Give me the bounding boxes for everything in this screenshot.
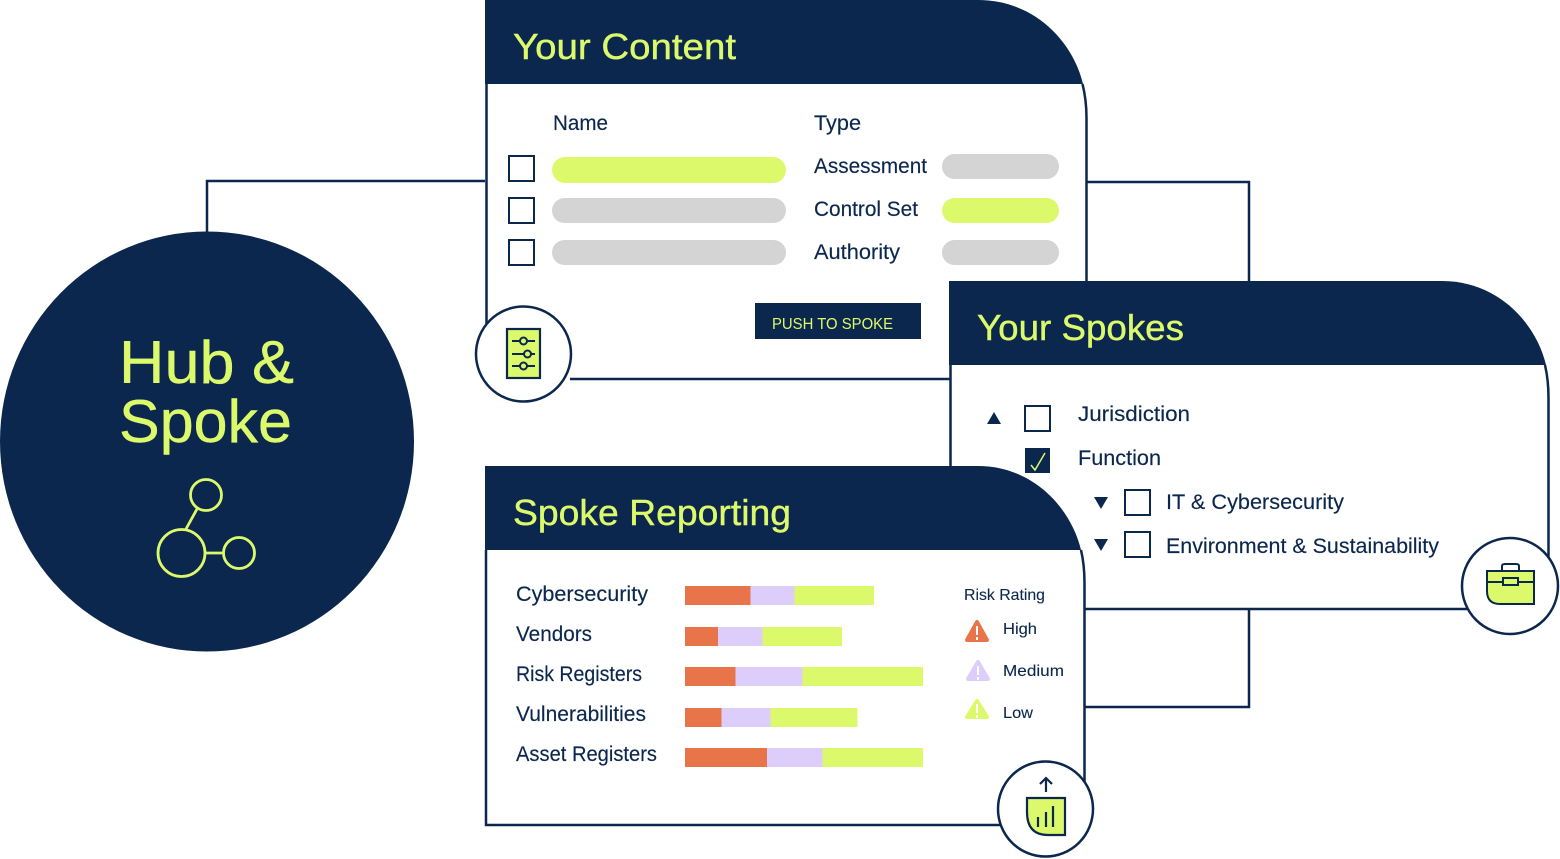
legend: medium: Medium — [1003, 663, 1064, 680]
legend: low: Low — [1003, 705, 1033, 722]
row labels: Vendors — [516, 623, 592, 646]
tree labels: IT & Cybersecurity — [1166, 491, 1345, 514]
header bar — [485, 0, 1083, 84]
panel: your content: Type — [814, 112, 861, 135]
risk rating legend: Risk Rating — [964, 587, 1045, 604]
type labels — [814, 155, 927, 264]
panel: your spokes — [949, 281, 1558, 634]
tree labels: Environment & Sustainability — [1166, 535, 1439, 558]
heading: Your Content — [513, 26, 736, 67]
header bar — [485, 466, 1081, 550]
row labels: Asset Registers — [516, 743, 657, 766]
name bars — [552, 157, 786, 265]
icon: sliders — [476, 306, 571, 402]
tree toggles — [987, 412, 1108, 551]
push to spoke button — [755, 303, 921, 339]
row labels: Risk Registers — [516, 663, 642, 686]
heading: Spoke Reporting — [513, 492, 791, 533]
icon: report upload — [998, 762, 1093, 856]
tree labels: Function — [1078, 447, 1161, 470]
type labels: Control Set — [814, 198, 918, 221]
hub circle — [0, 232, 414, 652]
legend: high: High — [1003, 621, 1037, 638]
type labels: Authority — [814, 241, 901, 264]
hub circle: Spoke — [119, 388, 292, 455]
row checkboxes — [509, 156, 534, 265]
push to spoke button: PUSH TO SPOKE — [772, 316, 893, 333]
heading: Your Spokes — [977, 307, 1184, 348]
stacked bar chart — [685, 586, 923, 767]
hub title: Hub & — [119, 329, 294, 396]
icon: hub and spoke network — [158, 480, 254, 576]
type labels: Assessment — [814, 155, 927, 178]
tree labels: Jurisdiction — [1078, 403, 1190, 426]
tree labels — [1078, 403, 1439, 558]
tree checkboxes — [1025, 406, 1150, 557]
connector lines — [207, 181, 1249, 707]
header bar — [949, 281, 1546, 365]
icon: briefcase — [1462, 538, 1558, 634]
row labels: Vulnerabilities — [516, 703, 646, 726]
panel: your content — [476, 0, 1086, 402]
column headers: Name — [553, 112, 608, 135]
type bars — [942, 154, 1059, 265]
row labels — [516, 583, 657, 766]
risk rating legend — [964, 587, 1064, 722]
row labels: Cybersecurity — [516, 583, 649, 606]
panel: spoke reporting — [485, 466, 1093, 856]
